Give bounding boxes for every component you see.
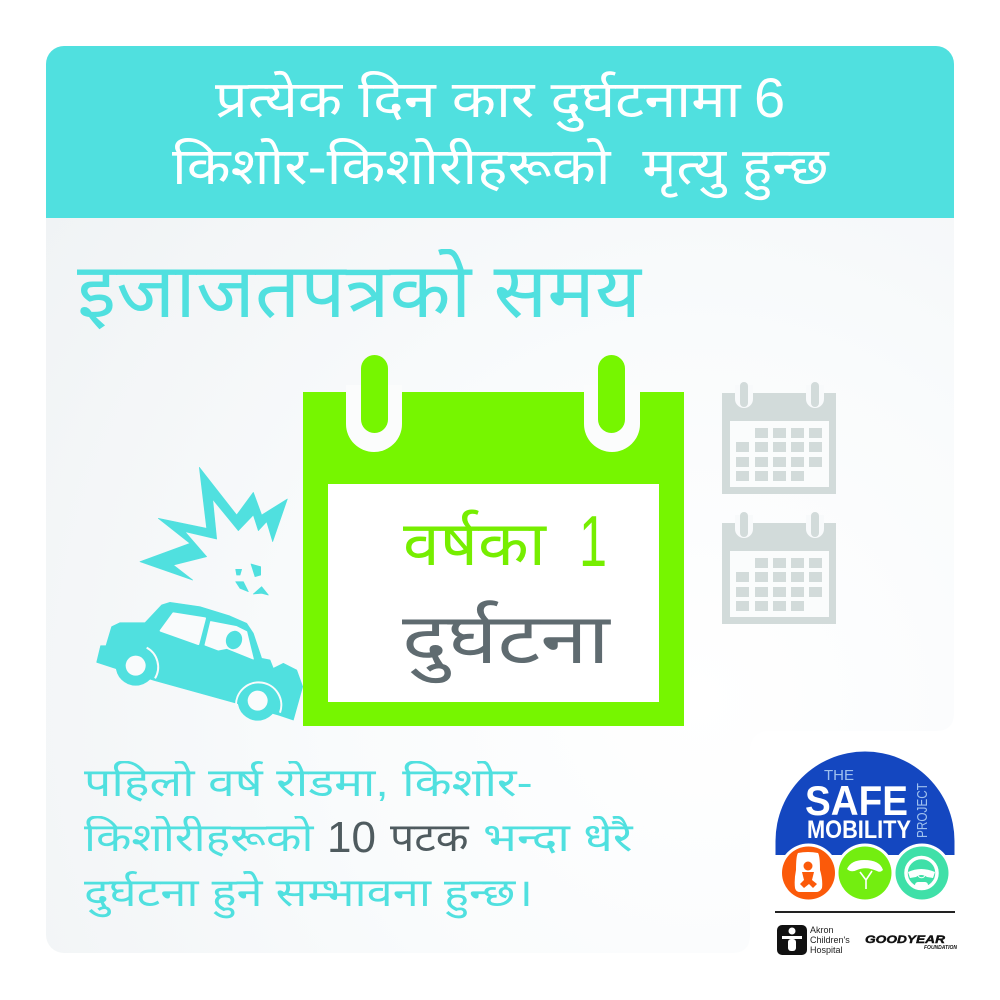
logo: safe mobility project: SAFE xyxy=(805,777,908,824)
text block: first year statistic: पटक xyxy=(390,817,469,860)
calendar text: crash: दुर्घटना xyxy=(402,600,610,678)
logo: safe mobility project: PROJECT xyxy=(914,783,931,838)
text block: first year statistic xyxy=(84,761,634,918)
icon: small calendar bottom xyxy=(722,512,836,624)
logo: safe mobility project: FOUNDATION xyxy=(924,945,957,951)
logo: safe mobility project: MOBILITY xyxy=(807,816,911,844)
subheading: licence period: इजाजतपत्रको समय xyxy=(77,249,641,334)
text block: first year statistic: पहिलो वर्ष रोडमा, किशोर- xyxy=(84,762,533,805)
logo: safe mobility project: GOODYEAR xyxy=(865,934,945,946)
heading: title line 2: किशोर-किशोरीहरूको मृत्यु हुन्छ xyxy=(172,138,829,195)
icon: crashed car with burst xyxy=(96,467,303,721)
logo: safe mobility project xyxy=(775,752,958,955)
text block: first year statistic: किशोरीहरूको xyxy=(84,817,313,860)
logo panel xyxy=(750,731,1000,1000)
calendar text: per year: वर्षका xyxy=(403,510,546,579)
text block: first year statistic: भन्दा धेरै xyxy=(483,817,633,860)
calendar text: per year xyxy=(403,502,607,582)
heading: title line 1: 6 xyxy=(754,66,785,129)
header band xyxy=(46,46,954,218)
text block: first year statistic: दुर्घटना हुने सम्भावना हुन्छ। xyxy=(84,872,533,915)
logo: safe mobility project: Hospital xyxy=(810,945,843,955)
logo: safe mobility project: Children's xyxy=(810,935,850,945)
big calendar xyxy=(303,355,684,726)
heading: title line 1: प्रत्येक दिन कार दुर्घटनामा xyxy=(215,71,741,128)
logo: safe mobility project: THE xyxy=(824,767,854,784)
logo: safe mobility project: Akron xyxy=(810,925,834,935)
icon: small calendar top xyxy=(722,382,836,494)
text block: first year statistic: 10 xyxy=(327,813,376,862)
calendar text: per year: 1 xyxy=(579,502,607,582)
